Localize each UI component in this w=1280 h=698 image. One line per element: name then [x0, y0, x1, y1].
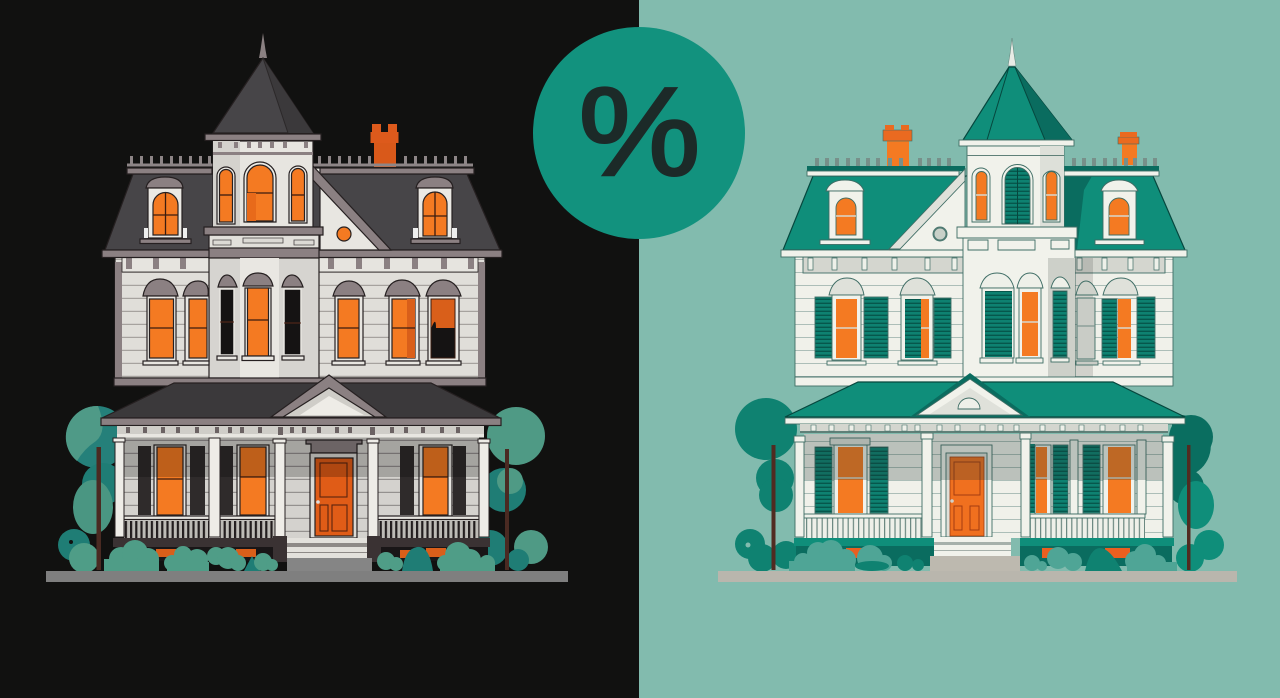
window 2: [183, 281, 209, 365]
bay window right: [282, 275, 304, 360]
turret spire: [259, 33, 267, 58]
shrubs: [104, 540, 495, 571]
front steps: [287, 538, 367, 558]
porch shadow: [804, 434, 1163, 480]
walkway: [287, 558, 372, 572]
turret cone roof: [963, 67, 1072, 140]
porch frieze: [117, 426, 484, 438]
upper windows: [815, 273, 1155, 365]
left dormer: [140, 177, 191, 244]
right dormer: [411, 177, 460, 244]
right trees and bushes: [472, 407, 548, 571]
front steps: [934, 537, 1011, 556]
window A: [332, 281, 365, 365]
porch back wall: [124, 437, 479, 540]
porch roof: [102, 383, 500, 418]
left trees and bushes: [735, 398, 800, 572]
porch columns: [113, 438, 490, 537]
pediment: [271, 375, 386, 417]
background: dark left panel: [0, 0, 639, 698]
right trees and bushes: [1168, 415, 1224, 572]
gable: [889, 169, 965, 250]
front door: [941, 445, 992, 537]
gable: [313, 166, 391, 250]
left chimney: [883, 125, 912, 166]
grey window: [1076, 281, 1098, 365]
eave: [781, 250, 1187, 257]
group 3: [1102, 278, 1155, 365]
chimney: [370, 124, 398, 167]
ground bar: [46, 571, 568, 582]
wall upper floor: [795, 257, 1173, 378]
background: teal right panel: [639, 0, 1280, 698]
turret base bands: [204, 227, 323, 258]
bay body: [957, 227, 1093, 378]
turret body: [213, 141, 313, 227]
porch railings: [804, 514, 1145, 538]
group 1: [815, 278, 888, 365]
window 1: [143, 279, 178, 365]
mansard roof: [105, 174, 500, 250]
ground bar: [718, 571, 1237, 582]
panel: dark house: [46, 33, 568, 582]
bay orange window: [1016, 273, 1043, 363]
foundation: [113, 536, 490, 562]
porch shadow: [124, 437, 479, 477]
turret cone roof: [213, 58, 313, 133]
porch roof: [785, 382, 1185, 417]
group 2: [898, 278, 951, 365]
bay shutter window: [980, 273, 1014, 363]
porch windows: [815, 438, 1146, 514]
walkway: [930, 556, 1020, 572]
porch frieze: [800, 424, 1168, 433]
left mansard roof: [783, 176, 966, 250]
shrubs: [789, 540, 1177, 571]
wall side trims: [115, 262, 485, 378]
window C: [426, 280, 461, 365]
frieze: [122, 257, 478, 272]
porch columns: [794, 433, 1174, 537]
left trees and bushes: [58, 406, 128, 573]
bay body: [209, 258, 319, 378]
front door: [306, 440, 362, 538]
pediment: [910, 373, 1030, 417]
roof top cornices: [127, 168, 474, 174]
left dormer: [820, 180, 870, 244]
percent badge: [533, 27, 745, 239]
turret cornice: [205, 134, 321, 140]
porch back wall: [804, 434, 1163, 538]
window B: [385, 280, 420, 365]
porch fascia: [101, 418, 501, 426]
turret windows: [217, 162, 307, 224]
roof rails: [807, 166, 1159, 176]
eave: [102, 250, 502, 258]
roof cresting: [815, 158, 1157, 166]
turret windows: [972, 164, 1060, 224]
floor band: [795, 377, 1173, 386]
percent sign: %: [578, 61, 701, 202]
turret spire: [1008, 38, 1016, 66]
porch railings: [124, 516, 479, 538]
right chimney: [1118, 132, 1139, 165]
badge circle: [533, 27, 745, 239]
floor band: [114, 378, 486, 386]
roof cresting: [127, 156, 473, 166]
right dormer: [1095, 180, 1144, 244]
foundation: [794, 538, 1174, 566]
porch windows: [138, 445, 466, 516]
wall upper floor: [115, 257, 485, 378]
porch fascia: [785, 418, 1185, 424]
bay window centre: [242, 273, 274, 360]
bay right shutter: [1051, 277, 1070, 362]
turret body: [967, 146, 1064, 228]
upper windows: [143, 273, 461, 365]
frieze: [803, 257, 1165, 273]
turret cornice: [959, 140, 1074, 146]
panel: teal house: [718, 38, 1237, 582]
right mansard roof: [1064, 176, 1185, 250]
bay window left: [217, 275, 237, 360]
